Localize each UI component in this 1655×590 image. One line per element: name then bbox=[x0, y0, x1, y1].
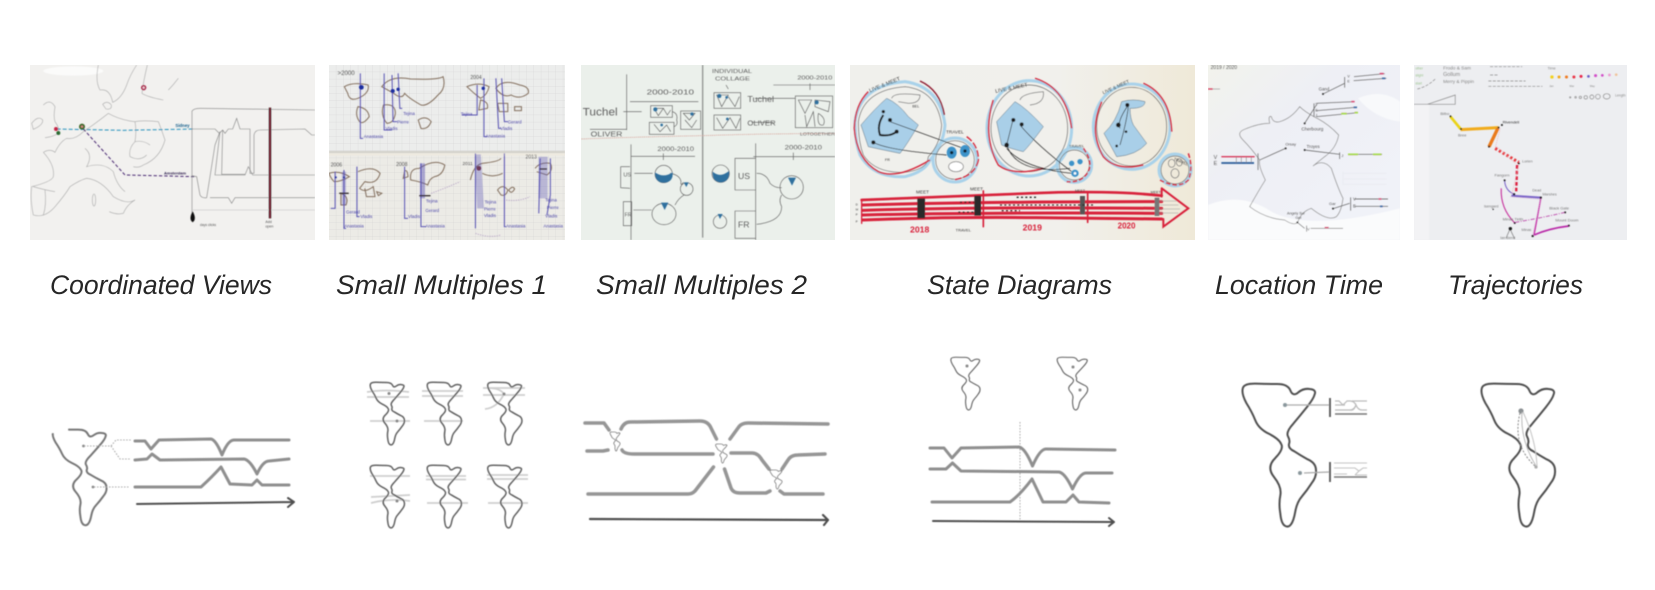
handwritten labels: V bbox=[1347, 75, 1350, 79]
France outline bbox=[1240, 107, 1343, 224]
left map bbox=[951, 357, 980, 410]
handwritten labels: 2020 bbox=[1118, 221, 1136, 230]
travel state markers bbox=[947, 145, 1182, 178]
handwritten labels: E bbox=[1347, 79, 1350, 83]
story lines bbox=[930, 447, 1115, 503]
handwritten labels: days clicks bbox=[200, 223, 216, 227]
legend text: Time bbox=[1548, 67, 1556, 71]
handwritten labels: LOTOGETHER bbox=[800, 131, 835, 136]
schematic: small multiples 1 bbox=[367, 382, 528, 528]
upper-left axis sketch bbox=[590, 74, 835, 134]
handwritten labels: Troyes bbox=[1307, 144, 1320, 149]
handwritten place names: Fangorn bbox=[1494, 173, 1510, 178]
handwritten names: 2004 bbox=[470, 75, 482, 81]
blue country shapes bbox=[861, 98, 1147, 157]
handwritten labels: LIVE & MEET bbox=[1102, 79, 1130, 95]
handwritten labels bbox=[164, 123, 273, 229]
legend text bbox=[1415, 66, 1626, 98]
handwritten names: Vladis bbox=[500, 126, 513, 131]
multiples top row bbox=[367, 382, 525, 445]
hand-drawn world maps bbox=[329, 77, 551, 205]
handwritten labels: MEET bbox=[1151, 191, 1162, 195]
trajectory curves bbox=[1518, 412, 1537, 466]
handwritten names: Anastasia bbox=[486, 134, 506, 139]
caption: Small Multiples 2: Small Multiples 2 bbox=[596, 270, 807, 300]
handwritten names: Gerard bbox=[425, 208, 440, 213]
handwritten names: Anastasia bbox=[506, 224, 526, 229]
time arrow bbox=[933, 518, 1114, 526]
handwritten names: Pierre bbox=[547, 205, 559, 210]
handwritten labels: Gar bbox=[1329, 201, 1336, 206]
handwritten labels: Gand bbox=[1319, 86, 1330, 91]
legend text: Gollum bbox=[1443, 72, 1461, 78]
handwritten labels: Sidney bbox=[175, 123, 190, 128]
time arrow bbox=[590, 515, 828, 525]
handwritten labels: Angely Sur bbox=[1287, 211, 1306, 215]
inset axis top bbox=[1335, 413, 1367, 415]
handwritten names: Vladis bbox=[386, 126, 398, 131]
handwritten labels: 2000-2010 bbox=[647, 87, 694, 96]
handwritten place names: Black Gate bbox=[1549, 205, 1570, 210]
legend bbox=[1414, 67, 1610, 104]
location connector lines bbox=[1258, 74, 1388, 232]
handwritten names: Vladis bbox=[408, 214, 421, 219]
handwritten labels: COLLAGE bbox=[715, 76, 751, 82]
handwritten names: Tejina bbox=[426, 199, 438, 204]
handwritten labels: TRAVEL bbox=[956, 228, 972, 233]
handwritten names: 2008 bbox=[396, 162, 408, 168]
handwritten labels: US bbox=[623, 173, 631, 179]
legend text: Mar bbox=[1570, 84, 1574, 88]
handwritten names: Anastasia bbox=[344, 224, 364, 229]
caption: Coordinated Views: Coordinated Views bbox=[50, 270, 272, 300]
handwritten names: Anastasia bbox=[364, 134, 384, 139]
destination dot bbox=[1534, 465, 1538, 469]
handwritten names: Gerard bbox=[508, 119, 522, 124]
handwritten labels: OLIVER bbox=[747, 118, 776, 127]
handwritten names: Anastasia bbox=[425, 223, 445, 228]
timeline chart lines bbox=[192, 108, 315, 213]
handwritten labels: 2000-2010 bbox=[657, 146, 695, 153]
handwritten names: Vladis bbox=[545, 214, 558, 219]
handwritten place names: Rivendell bbox=[1503, 119, 1519, 124]
handwritten labels: D bbox=[856, 203, 859, 207]
inset storyline top bbox=[1335, 401, 1367, 410]
legend text: Jan bbox=[1549, 84, 1554, 88]
handwritten labels: Tuchel bbox=[583, 107, 618, 119]
handwritten labels: Amsterdam bbox=[164, 171, 186, 176]
faint embossed lines bbox=[1343, 172, 1386, 185]
handwritten labels: V bbox=[1307, 227, 1310, 232]
handwritten place names bbox=[1440, 111, 1579, 240]
red arcs bbox=[854, 78, 1191, 185]
handwritten place names: Minas Tirith bbox=[1503, 216, 1523, 221]
handwritten names: 2013 bbox=[525, 154, 537, 160]
handwritten labels: V bbox=[1214, 155, 1218, 161]
handwritten labels: 2000-2010 bbox=[797, 76, 832, 82]
schematic: coordinated views bbox=[50, 426, 294, 525]
handwritten labels: OLIVER bbox=[591, 129, 622, 138]
coloured presence bars bbox=[1208, 74, 1385, 228]
handwritten place names: Mount Doom bbox=[1555, 218, 1579, 223]
handwritten names: Pierre bbox=[484, 207, 496, 212]
handwritten labels: P bbox=[856, 212, 858, 216]
handwritten labels: FR bbox=[885, 158, 890, 162]
handwritten labels: FR bbox=[625, 213, 632, 219]
handwritten labels: 2019 / 2020 bbox=[1211, 65, 1237, 71]
handwritten names: 2006 bbox=[331, 163, 342, 169]
handwritten place names: Minas bbox=[1522, 228, 1532, 232]
legend colour dots bbox=[1550, 73, 1618, 79]
legend text: Frodo & Sam bbox=[1443, 66, 1471, 71]
handwritten labels: Add bbox=[265, 220, 272, 224]
broken story lines bbox=[585, 421, 828, 494]
handwritten labels: Orsay bbox=[1285, 141, 1296, 146]
meet columns and dotted presence bbox=[917, 196, 1180, 218]
handwritten labels: open bbox=[265, 225, 273, 229]
handwritten place names: Marshes bbox=[1542, 193, 1557, 197]
caption: Small Multiples 1: Small Multiples 1 bbox=[336, 270, 547, 300]
handwritten labels: MEET bbox=[916, 190, 929, 195]
story lines bbox=[135, 439, 289, 487]
handwritten names: Tejina bbox=[403, 111, 415, 116]
multiples bottom row bbox=[370, 465, 528, 528]
handwritten labels: 2019 bbox=[1023, 222, 1042, 232]
handwritten place names: Bree bbox=[1458, 133, 1467, 138]
handwritten labels: 2000-2010 bbox=[785, 144, 823, 151]
handwritten names: >2000 bbox=[338, 71, 355, 77]
handwritten names: Gerard bbox=[346, 209, 360, 214]
blue filled glyphs bbox=[653, 94, 819, 219]
map with locations bbox=[50, 426, 107, 525]
handwritten names bbox=[331, 71, 564, 229]
handwritten labels bbox=[583, 69, 835, 230]
purple name lines bbox=[331, 73, 550, 228]
state blobs with blue halos bbox=[855, 81, 1191, 186]
panel: small multiples 2 photo bbox=[581, 65, 835, 240]
handwritten labels: E bbox=[1353, 204, 1356, 209]
handwritten labels: INDIVIDUAL bbox=[712, 69, 752, 75]
handwritten labels: LIVE & MEET bbox=[995, 82, 1029, 95]
dotted connectors bbox=[84, 440, 131, 487]
handwritten labels: BEL bbox=[912, 105, 919, 109]
handwritten place names: Dead bbox=[1532, 189, 1541, 193]
panel: state diagrams photo bbox=[850, 65, 1195, 240]
handwritten labels: E bbox=[1214, 161, 1218, 167]
trajectory segments bbox=[1451, 117, 1569, 239]
panel: small multiples 1 photo bbox=[329, 65, 565, 240]
timeline arrow bbox=[862, 188, 1188, 227]
handwritten labels: V bbox=[1315, 103, 1318, 107]
lower axis sketches bbox=[621, 143, 835, 240]
connector: Sidney dashed line bbox=[57, 129, 193, 130]
handwritten names: Vladis bbox=[484, 213, 497, 218]
legend text: other bbox=[1415, 67, 1424, 71]
handwritten names: Tejina bbox=[545, 197, 557, 202]
other country outlines bbox=[892, 92, 1044, 105]
handwritten names: Tejina bbox=[461, 111, 473, 116]
panel: coordinated views photo bbox=[30, 65, 315, 240]
drop marker bbox=[191, 212, 194, 222]
location dots bbox=[1285, 93, 1334, 223]
center fold and divider bbox=[701, 65, 705, 238]
handwritten names: 2011 bbox=[462, 161, 473, 166]
legend text: start bbox=[1415, 81, 1422, 85]
handwritten labels: FR bbox=[738, 220, 750, 230]
handwritten names: Tejina bbox=[485, 199, 497, 204]
handwritten labels bbox=[1211, 65, 1356, 232]
caption: Trajectories: Trajectories bbox=[1448, 270, 1583, 300]
panel: trajectories photo bbox=[1414, 65, 1627, 240]
right map bbox=[1057, 357, 1088, 410]
shaded bands bbox=[335, 85, 548, 208]
legend text: slight bbox=[1415, 73, 1423, 77]
legend text: May bbox=[1590, 84, 1596, 88]
handwritten labels: M bbox=[856, 208, 859, 212]
handwritten place names: Isengard bbox=[1484, 204, 1498, 208]
inset axis bottom bbox=[1334, 476, 1367, 478]
handwritten labels: E bbox=[1315, 108, 1318, 112]
map bbox=[1481, 384, 1555, 527]
handwritten names: Vladis bbox=[360, 214, 373, 219]
caption: Location Time: Location Time bbox=[1215, 270, 1383, 300]
handwritten labels: Tuchel bbox=[747, 94, 774, 104]
caption: State Diagrams: State Diagrams bbox=[927, 270, 1112, 300]
schematic: location time bbox=[1242, 384, 1367, 527]
map of Europe sketch bbox=[31, 65, 178, 216]
handwritten place names: Ian Bend bbox=[1500, 236, 1515, 240]
connector: Amsterdam dashed line bbox=[83, 129, 195, 177]
handwritten place names: Lorien bbox=[1522, 159, 1533, 163]
map with callouts bbox=[1242, 384, 1330, 527]
handwritten labels: LIVE & MEET bbox=[869, 76, 902, 94]
handwritten labels: 2018 bbox=[910, 225, 929, 235]
handwritten labels: TRAVEL bbox=[946, 129, 964, 134]
handwritten labels: J bbox=[1341, 153, 1343, 158]
inset storyline bottom bbox=[1334, 463, 1367, 475]
handwritten place names: Bilbo bbox=[1440, 111, 1450, 116]
time arrow bbox=[137, 498, 294, 507]
handwritten labels bbox=[856, 76, 1190, 235]
time marker bar bbox=[266, 108, 274, 218]
handwritten labels: Cherbourg bbox=[1301, 126, 1324, 131]
handwritten names: Pierre bbox=[397, 119, 409, 124]
embedded mini maps bbox=[610, 432, 782, 489]
time cursor bbox=[1019, 422, 1021, 522]
handwritten names: Anastasia bbox=[544, 223, 564, 228]
handwritten labels: P bbox=[856, 219, 858, 223]
handwritten labels: MEET bbox=[1075, 189, 1086, 193]
handwritten labels: Ger bbox=[1295, 216, 1302, 220]
schematic: state diagrams bbox=[930, 357, 1115, 526]
handwritten labels: J bbox=[1315, 113, 1317, 117]
legend text: Length bbox=[1615, 94, 1626, 98]
origin dot bbox=[1518, 408, 1524, 414]
handwritten labels: V bbox=[1353, 197, 1356, 202]
handwritten labels: TRAVEL bbox=[1069, 143, 1085, 148]
handwritten labels: MEET bbox=[970, 186, 983, 191]
schematic: trajectories bbox=[1481, 384, 1555, 527]
handwritten labels: US bbox=[738, 171, 750, 181]
legend text: Merry & Pippin bbox=[1443, 79, 1474, 84]
panel: location time photo bbox=[1208, 65, 1400, 240]
trajectories and nodes bbox=[873, 105, 1128, 173]
location markers bbox=[54, 85, 146, 135]
schematic: small multiples 2 bbox=[585, 421, 828, 525]
handwritten labels: TRAVEL bbox=[1173, 156, 1190, 167]
trajectory stop dots bbox=[1450, 115, 1570, 237]
